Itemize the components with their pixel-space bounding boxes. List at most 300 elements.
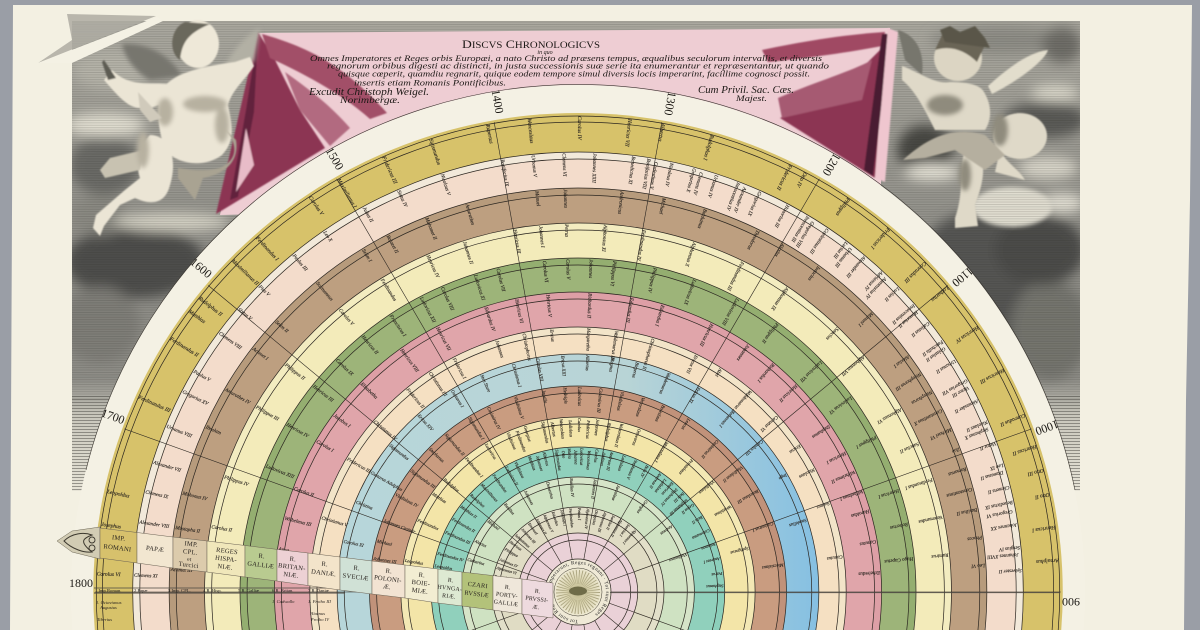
ring 1: Imperatores Romani: Fridericus I [868,225,891,251]
ring 7: Reges Daniae: Ericus [548,328,554,342]
ring 11: Reges Hungariae: Maximilianus [479,482,499,503]
ring 1: Imperatores Romani: Arnulphus [1036,557,1060,564]
ring 5: Reges Galliae: Henricus II [359,334,379,356]
ring 6: Reges Britanniae: Wilhelmus II [830,469,856,484]
left flourish ornament [57,527,100,559]
ring 4: Reges Hispaniae: Philippus II [283,362,306,382]
ring 4: Reges Hispaniae: Ferdinandus I [904,476,934,490]
ring 10: Reges Boiemiae: Rudolphus [604,421,612,442]
kingdom header labels: RIÆ. [442,593,456,601]
body text: in quo [537,50,553,56]
ring 2: Papae: Innocentius IV [724,181,740,211]
ring 11: Reges Hungariae: Josephus [433,575,449,582]
early ruler names below axis: 1. Cadwallo [272,599,295,604]
kingdom header labels: POLONI- [374,574,402,585]
engraved background panel [60,21,1090,491]
ring 13: Reges Portugalliae: Philippus [503,547,519,558]
ring 11: Reges Hungariae: Salomon [701,542,716,552]
century scale labels: 1500 [323,145,347,172]
body text: Omnes Imperatores et Reges orbis Europæi, a nato Christo ad præsens tempus, æqualibus seculorum intervallis, et diversis [310,53,823,63]
ring 3: Imperatores Constantinopolitani et Turcici: Alexius [773,241,785,257]
ring 2: Papae: Gregorius VI [986,508,1013,518]
ring 1: Imperatores Romani: Henricus I [1031,524,1057,533]
century scale labels: 1100 [949,264,976,290]
left cherub [93,20,260,236]
ring 2: Papae: Honorius III [773,203,790,228]
ring 1: Imperatores Romani: Maximilianus I [335,177,358,210]
ring 4: Reges Hispaniae: Carolus II [211,525,232,534]
ring 13: Reges Portugalliae: Alphonsus I [621,528,638,545]
ring 2: Papae: Sergius IV [998,544,1020,551]
ring 6: Reges Britanniae: Jacobus I [332,414,351,429]
ring 1: Imperatores Romani: Leopoldus [105,489,130,500]
top-left sky wedge [38,14,156,63]
ring 7: Reges Daniae: Ericus VII [684,353,698,374]
curtain [216,28,898,215]
ring 11: Reges Hungariae: Johannes [535,455,545,472]
ring 6: Reges Britanniae: Henricus VII [434,326,451,352]
kingdom header labels: Æ. [382,583,391,591]
ring 11: Reges Hungariae: Sigismundus [554,449,563,471]
ring 12: Czari Russiae: Petrus [462,576,475,582]
ring 2: Papae: Paulus III [290,253,308,273]
ring 7: Reges Daniae: Abel [713,366,723,378]
ring 4: Reges Hispaniae [205,223,950,570]
ring 1: Imperatores Romani: Rupertus [484,123,494,144]
ring 1: Imperatores Romani: Fridericus II [775,162,793,192]
right cherub [898,26,1048,228]
ring 13: Reges Portugalliae: Alphonsus III [597,511,607,533]
ring 13: Reges Portugalliae: Petrus I [577,507,581,521]
axis labels [95,588,329,593]
ring 2: Papae: Johannes XVIII [987,551,1019,559]
ring 13: Reges Portugalliae: Dionysius [591,509,599,526]
ring 9: Reges Poloniae: Michael [375,538,393,547]
ring 11: Reges Hungariae: Ferdinandus [491,472,508,494]
ring 4: Reges Hispaniae: Sancius [824,326,839,341]
ring 11: Reges Hungariae: Stephanus III [668,498,689,517]
ring 13: Reges Portugalliae: Sancius I [618,523,630,538]
head [934,35,982,81]
ring 2: Papae: Innocentius III [790,214,810,243]
ring 4: Reges Hispaniae: Philippus III [254,405,279,423]
kingdom header labels: CPL. [183,548,198,557]
ring 2: Papae: Paschalis II [921,338,944,357]
kingdom header labels: DANIÆ. [311,568,337,579]
ring 10: Reges Boiemiae: Ferdinandus [514,429,528,453]
ring 12: Czari Russiae: Johannes II [590,479,598,500]
ring 2: Papae: Gregorius X [684,167,696,193]
ring 6: Reges Britanniae: Henricus II [777,382,798,403]
ring 1: Imperatores Romani: Conradus III [902,260,927,284]
ring 5: Reges Galliae: Ludovicus XIII [264,464,295,480]
ring 10: Reges Boiemiae: Sigismundus [540,421,550,444]
ring 2: Papae: Clemens IV [691,171,703,196]
axis labels: 3 Imp. CPL. [168,588,191,593]
kingdom header labels: R. [353,565,360,572]
body [902,66,1047,228]
ring 3: Imperatores Constantinopolitani et Turcici: Johannes [562,189,567,208]
ring 7: Reges Daniae: Johannes [494,340,504,359]
kingdom header labels: CZARI [467,581,488,590]
century scale labels: 1000 [1033,417,1061,438]
ring 13: Reges Portugalliae: Johannes I [559,509,567,527]
ring 9: Reges Poloniae: Mieczislaus [761,562,785,570]
ring 3: Imperatores Constantinopolitani et Turcici: Theodorus [745,229,759,250]
kingdom header labels: NIÆ. [283,571,299,580]
ring 10: Reges Boiemiae: Vladislaus [698,479,715,495]
ring 7: Reges Daniae: Christophorus [520,333,531,361]
ring 2: Papae: Coelestinus V [648,161,658,190]
ring 11: Reges Hungariae: Emericus [660,480,675,497]
ring 12: Czari Russiae: Basilius IV [569,478,575,497]
ring 10: Reges Boiemiae: Leopoldus [403,558,424,566]
ring 6: Reges Britanniae: Wilhelmus I [839,488,863,501]
ring 9: Reges Poloniae: Sigismundus III [410,468,437,490]
early ruler names below axis: 1. Octavianus [96,600,122,605]
kingdom header labels [103,533,550,612]
ring 8: Reges Sveciae: Ericus XI [688,385,702,404]
ring 6: Reges Britanniae: Edvardus III [624,296,634,323]
ring 13: Reges Portugalliae: Alphonsus VI [495,566,518,576]
ring 11: Reges Hungariae: Matthias [527,454,537,471]
ring 2: Papae: Alexander IV [731,185,747,213]
ring 2: Papae: Clemens XI [134,574,158,579]
ring 1: Imperatores Romani: Otto II [1033,491,1050,500]
ring 8: Reges Sveciae: Magnus [608,356,616,373]
ring 13: Reges Portugalliae: Sebastianus [514,534,531,549]
kingdom header labels: R. [321,561,328,568]
ring 13: Reges Portugalliae: Eduardus [550,510,559,527]
ring 9: Reges Poloniae: Stephanus [428,447,445,464]
ring 1: Imperatores Romani: Maximilianus II [229,258,260,288]
ring 6: Reges Britanniae: Henricus III [698,321,714,347]
ring 1: Imperatores Romani: Rudolphus II [196,295,224,318]
ring 4: Reges Hispaniae: Alphonsus VII [840,353,866,376]
ring 4: Reges Hispaniae: Alphonsus VI [876,406,903,424]
ring 2: Papae: Gregorius VII [941,377,968,395]
ring 9: Reges Poloniae: Vladislaus V [513,396,525,421]
ring 11: Reges Hungariae: Ludovicus [579,447,585,466]
kingdom header labels: Turcici [178,561,199,570]
kingdom header labels: ROMANI [103,543,132,554]
title cartouche text [308,37,830,105]
ring 12: Czari Russiae: Jaroslaus [611,485,621,502]
kingdom header labels: R. [447,578,454,584]
radial names per ring [97,116,1060,589]
ring 5: Reges Galliae: Ludovicus XI [472,273,485,301]
sword blade [38,17,163,63]
ring 1: Imperatores Romani: Otto IV [794,171,808,188]
ring 8: Reges Sveciae: Sten Sture [480,374,492,393]
ring 8: Reges Sveciae: Ingo [777,472,789,481]
ring 13: Reges Portugalliae: Sancius II [605,515,615,531]
ring 2: Papae: Adrianus IV [862,269,884,291]
ring 10: Reges Boiemiae: Carolus [577,418,582,432]
ring 11: Reges Hungariae: Albertus [542,450,550,467]
century scale labels: 1200 [820,151,844,178]
body text: Cum Privil. Sac. Cæs. [698,85,794,96]
ring 8: Reges Sveciae: Christianus I [511,363,523,388]
ring 8: Reges Sveciae: Albertus [585,354,590,371]
ring 6: Reges Britanniae: Canutus [859,538,877,546]
ring 2: Papae: Urbanus III [833,246,852,268]
ring 1: Imperatores Romani: Fridericus III [380,155,398,186]
ring 9: Reges Poloniae: Hedvigis [562,386,569,404]
ring 3: Imperatores Constantinopolitani et Turcici: Achmet III [170,568,193,574]
ring 7: Reges Daniae: Fridericus III [345,457,371,475]
ring 7: Reges Daniae: Waldemarus III [609,330,618,361]
ring 2: Papae: Stephanus X [963,426,989,440]
kingdom header labels: IMP. [111,534,126,543]
ring 9: Reges Poloniae: Johannes III [373,556,397,565]
ring 5: Reges Galliae: Philippus IV [646,266,657,294]
ring 10: Reges Boiemiae: Albertus [550,421,557,437]
ring 2: Papae: Nicolaus V [438,173,451,197]
ring 10: Reges Boiemiae: Vladislaus [505,431,518,451]
ring 10: Reges Boiemiae: Primislaus [678,457,695,476]
axis labels: 5 R. Galliæ [238,588,259,593]
ring 5: Reges Galliae: Ludovicus VI [828,394,853,414]
ring 2: Papae: Calixtus II [910,320,930,337]
ring 10: Reges Boiemiae: Rudolphus [442,476,460,493]
ring 5: Reges Galliae: Henricus IV [284,422,310,440]
body text [308,50,830,105]
ring 11: Reges Hungariae: Carolus [593,449,600,463]
ring 3: Imperatores Constantinopolitani et Turcici: Zoe [950,446,960,453]
ring 12: Czari Russiae: Basilius [503,502,516,516]
ring 1: Imperatores Romani: Albertus [656,122,666,142]
ring 2: Papae: Urbanus II [935,358,956,374]
ring 1: Imperatores Romani: Lotharius [929,284,950,303]
axis labels: 6 R. Britan. [272,588,293,593]
ring 1: Imperatores Romani: Josephus [101,522,121,530]
kingdom header labels: R. [534,589,541,595]
ring 9: Reges Poloniae: Vladislaus IV [394,492,420,509]
ring 2: Papae: Clemens IX [145,490,170,501]
ring 9: Reges Poloniae: Casimirus II [700,439,720,460]
ring 2: Papae: Benedictus IX [984,499,1013,510]
ring 12: Czari Russiae: Andreas [659,524,675,537]
ring 2: Papae: Gregorius VIII [794,220,814,248]
ring 5: Reges Galliae: Henricus III [310,384,334,404]
ring 8: Reges Sveciae: Sigismundus [388,443,410,461]
kingdom header labels: Æ. [532,605,540,611]
ring 13: Reges Portugalliae [493,507,638,588]
ring 7: Reges Daniae: Svenus [816,500,830,509]
kingdom header labels: PORTV- [495,592,518,600]
ring 8: Reges Sveciae: Carolus VII [744,439,764,457]
ring 5: Reges Galliae: Robertus [889,521,909,529]
ring 2: Papae: Alexander II [953,397,980,413]
ring 2: Papae [134,153,1022,579]
kingdom header labels: REGES [216,547,238,556]
ring 6: Reges Britanniae: Anna [277,547,290,554]
ring 5: Reges Galliae: Henricus I [877,487,900,499]
ring 5: Reges Galliae: Carolus VII [495,268,505,292]
ring 11: Reges Hungariae: Ladislaus [617,454,627,472]
ring 2: Papae: Johannes XXII [590,153,597,183]
kingdom header labels: HVNGA- [437,584,462,593]
ring 2: Papae: Clemens VIII [217,332,242,351]
ring 7: Reges Daniae: Fridericus II [404,387,425,410]
ring 4: Reges Hispaniae: Petrus [563,223,568,237]
ring 6: Reges Britanniae: Henricus I [825,449,847,464]
ring 7: Reges Daniae [311,327,843,569]
ring 3: Imperatores Constantinopolitani et Turcici: Selim I [360,249,372,263]
ring 3: Imperatores Constantinopolitani et Turcici: Romanus [947,465,968,476]
ring 6: Reges Britanniae: Johannes [735,343,750,361]
ring 1: Imperatores Romani: Conradus II [998,412,1026,428]
ring 4: Reges Hispaniae: Ramirus [931,551,950,558]
dividing horizontal axis [94,588,1060,593]
head [177,20,219,68]
ring 11: Reges Hungariae: Andreas I [703,556,721,565]
kingdom header labels: BRITAN- [278,562,306,573]
ring 2: Papae: Lucius II [883,285,900,302]
body text: insertis etiam Romanis Pontificibus. [354,78,506,88]
ring 12: Czari Russiae: Vladimirus [668,552,688,563]
ring 2: Papae: Nicolaus II [965,418,989,432]
ring 10: Reges Boiemiae [402,418,749,582]
kingdom header labels: R. [289,556,297,563]
ring 13: Reges Portugalliae: Johannes V [493,583,512,588]
ring 1: Imperatores Romani: Otto III [1026,467,1044,477]
ring 10: Reges Boiemiae: Ferdinandus I [463,455,484,479]
ring 10: Reges Boiemiae: Josephus [402,576,419,582]
ring 1: Imperatores Romani: Ferdinandus II [168,336,200,359]
ring 7: Reges Daniae: Christianus V [321,516,349,529]
ring 10: Reges Boiemiae: Wenceslaus [559,419,566,440]
ring 2: Papae: Benedictus XI [627,156,635,185]
ring 2: Papae: Damasus II [980,469,1005,480]
ring 11: Reges Hungariae: Stephanus IV [660,487,679,507]
ring 5: Reges Galliae [242,259,914,563]
ring 7: Reges Daniae: Christianus III [427,371,447,398]
ring 3: Imperatores Constantinopolitani et Turcici: Nicephorus III [894,370,923,391]
ring 7: Reges Daniae: Margaretha [584,327,590,352]
ring 4: Reges Hispaniae: Veremundus [918,514,943,523]
ring 8: Reges Sveciae: Ericus XIV [416,412,435,432]
ring 7: Reges Daniae: Waldemarus II [730,388,752,414]
ring 1: Imperatores Romani: Henricus IV [954,324,980,344]
ring 10: Reges Boiemiae: Ferdinandus [416,517,440,531]
kingdom header labels: IMP. [184,540,198,549]
ring 5: Reges Galliae: Carolus VI [541,261,548,283]
ring 3: Imperatores Constantinopolitani et Turcici: Mahomet IV [181,491,208,503]
ring 3: Imperatores Constantinopolitani et Turcici: Basilius II [956,506,978,515]
ring 11: Reges Hungariae: Maria [567,447,573,459]
ring 2: Papae: Victor III [951,384,970,398]
ring 4: Reges Hispaniae: Johannes II [461,241,473,265]
axis labels: 4 R. Hisp. [203,588,222,593]
ring 4: Reges Hispaniae: Henricus IV [424,254,440,280]
ring 3: Imperatores Constantinopolitani et Turcici: Amurathes [463,203,475,226]
ring 7: Reges Daniae: Canutus [826,553,843,560]
ring 5: Reges Galliae: Philippus VI [609,260,616,286]
ring 10: Reges Boiemiae: Wenceslaus I [653,441,670,464]
ring 1: Imperatores Romani: Henricus VII [623,117,632,148]
ring 6: Reges Britanniae: Wilhelmus III [284,517,312,528]
ring 11: Reges Hungariae: Bela III [672,491,686,504]
ring 5: Reges Galliae: Philippus II [760,321,779,344]
ring 1: Imperatores Romani: Henricus III [978,366,1006,385]
ring 6: Reges Britanniae: Stephanus [810,423,831,439]
ring 8: Reges Sveciae: Birgerus [631,362,640,379]
ring 6: Reges Britanniae: Edvardus IV [482,306,495,333]
ring 11: Reges Hungariae: Petrus [711,571,724,577]
ring 12: Czari Russiae: Johannes [523,489,535,506]
ring 10: Reges Boiemiae: Wenceslaus II [614,423,625,448]
ring 2: Papae: Bonifacius VIII [641,158,650,189]
ring 5: Reges Galliae: Ludovicus IX [682,277,696,306]
ring 9: Reges Poloniae: Boleslaus [654,404,666,423]
body text: Excudit Christoph Weigel. [308,87,429,98]
ring 9: Reges Poloniae: Venceslaus [635,397,646,418]
ring 6: Reges Britanniae: Henricus V [544,293,552,318]
axis labels: 1 Imp.Roman. [95,588,121,593]
ring 4: Reges Hispaniae: Alphonsus IX [769,285,789,312]
ring 3: Imperatores Constantinopolitani et Turcici: Phocas [967,534,983,541]
ring 7: Reges Daniae: Christophorus II [641,338,655,370]
ring 3: Imperatores Constantinopolitani et Turcici: Bajazet II [385,235,399,255]
ring 4: Reges Hispaniae: Carolus V [337,308,355,328]
ring 5: Reges Galliae: Ludovicus XIV [242,554,274,562]
kingdom header labels: SVECIÆ [342,572,369,583]
kingdom header labels: RVSSIÆ [464,590,489,599]
ring 8: Reges Sveciae: Carolus VIII [535,358,544,382]
ring 8: Reges Sveciae [339,354,807,574]
ring 3: Imperatores Constantinopolitani et Turcici: Mahomet II [423,216,437,241]
ring 3: Imperatores Constantinopolitani et Turcici: Selim II [274,320,289,335]
ring 10: Reges Boiemiae: Johannes [594,419,600,436]
century scale labels: 1300 [661,91,679,117]
ring 3: Imperatores Constantinopolitani et Turcici: Solimannus [314,281,333,302]
ring 9: Reges Poloniae: Vladislaus [616,391,625,411]
ring 5: Reges Galliae: Ludovicus VII [798,359,823,383]
ring 4: Reges Hispaniae: Ferdinandus [378,277,397,302]
ring 2: Papae: Pius V [256,284,271,298]
ring 11: Reges Hungariae: Johanna [573,450,579,465]
early ruler names below axis: Frotho IV [310,617,330,622]
ring 11: Reges Hungariae: Ferdinandus II [450,516,476,534]
wings [122,44,182,80]
ring 4: Reges Hispaniae: Philippus IV [222,475,250,488]
ring 2: Papae: Victor II [979,440,997,450]
ring 7: Reges Daniae: Ericus [788,442,802,454]
ring 2: Papae: Sylvester II [998,567,1022,573]
ring 1: Imperatores Romani: Carolus IV [576,116,582,140]
ring 9: Reges Poloniae: Jagello [541,389,548,404]
ring 11: Reges Hungariae: Ferdinandus IV [436,551,464,563]
body text: regnorum orbibus digesti ac distincti, in justa successionis suæ serie ita enumerantur et repræsentantur, ut quando [327,60,830,70]
ring 9: Reges Poloniae: Vladislaus II [722,465,744,484]
ring 8: Reges Sveciae: Carolus XII [339,567,362,574]
ring 11: Reges Hungariae: Bela IV [639,464,650,478]
ring 12: Czari Russiae: Michael [486,518,501,532]
ring 11: Reges Hungariae: Bela II [691,515,704,525]
ring 11: Reges Hungariae: Ludovicus II [504,464,520,487]
ring 11: Reges Hungariae: Leopoldus [433,563,453,571]
ring 9: Reges Poloniae: Johannes Casimir [383,518,416,534]
ring 8: Reges Sveciae: Christina [355,500,374,511]
ring 4: Reges Hispaniae: Alphonsus XI [600,224,607,252]
ring 9: Reges Poloniae: Ludovicus [577,386,582,406]
ring 1: Imperatores Romani: Rudolphus I [701,133,715,162]
ring 12: Czari Russiae: Demetrius [545,480,555,500]
ring 8: Reges Sveciae: Carolus XI [343,539,365,548]
ring 1: Imperatores Romani: Matthias [186,308,206,325]
